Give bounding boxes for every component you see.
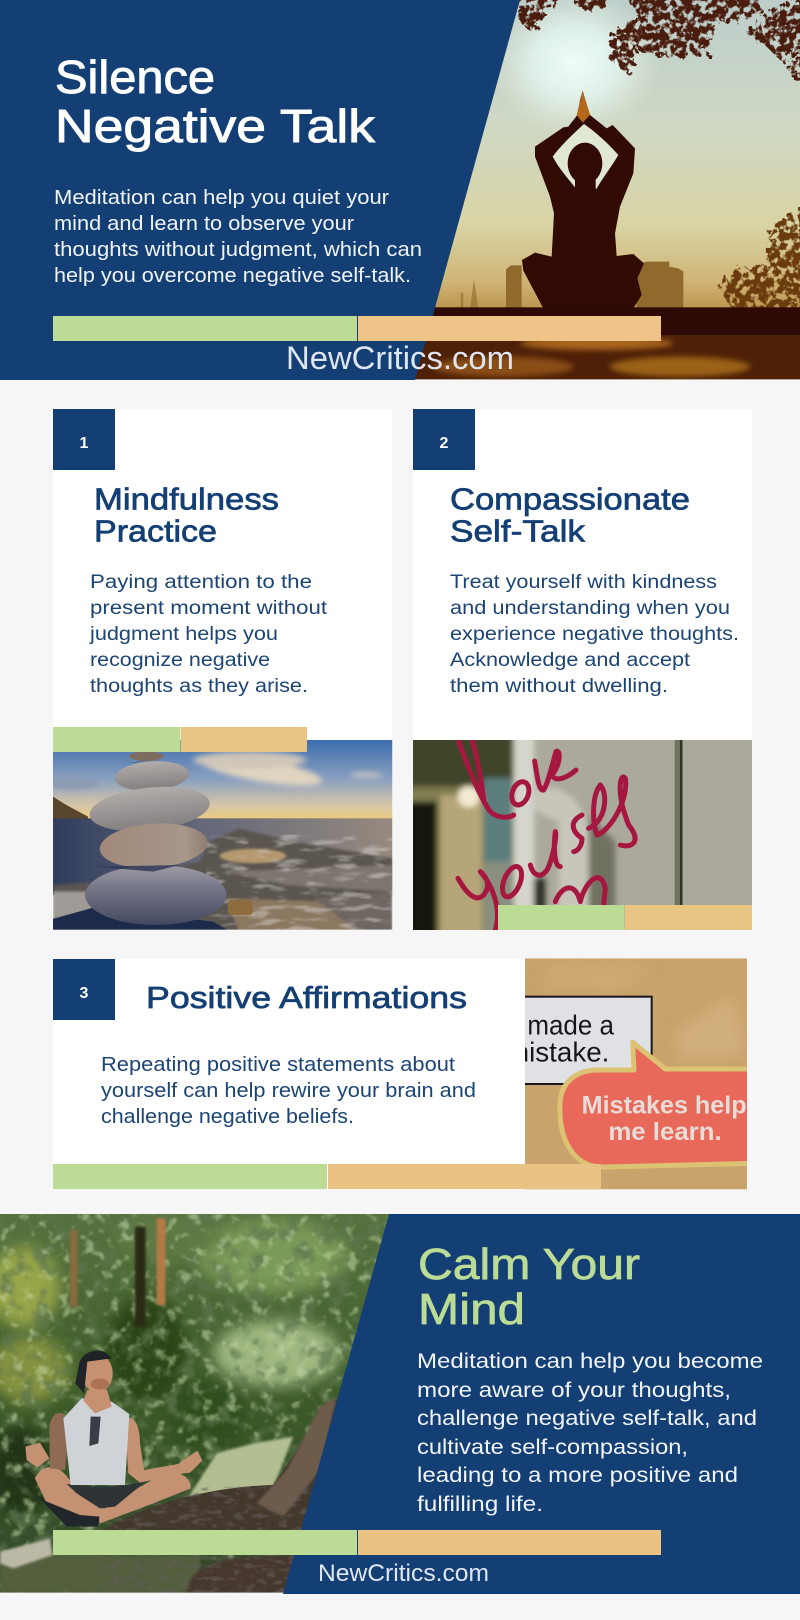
body text <box>450 572 739 697</box>
body text: recognize negative <box>90 650 270 671</box>
intro text: help you overcome negative self-talk. <box>54 265 411 287</box>
photo: yoga silhouette at sunset <box>410 0 800 380</box>
ground <box>432 307 800 335</box>
heading <box>94 482 279 548</box>
body text: Treat yourself with kindness <box>450 572 717 593</box>
grass <box>187 1437 293 1500</box>
sign card <box>520 997 652 1084</box>
body text: judgment helps you <box>89 624 278 645</box>
heading: Compassionate <box>450 482 690 516</box>
body text: present moment without <box>90 598 328 619</box>
heading: Mindfulness <box>94 482 279 516</box>
title: Negative Talk <box>55 100 376 152</box>
photo: love yourself mirror <box>413 740 752 930</box>
body text: Repeating positive statements about <box>101 1054 455 1076</box>
handwriting <box>458 740 635 930</box>
body text: Acknowledge and accept <box>450 650 691 671</box>
panel: card 3 positive affirmations <box>53 958 753 1189</box>
panel: card 2 compassionate self-talk <box>399 409 755 942</box>
heading <box>450 482 690 548</box>
intro text: Meditation can help you quiet your <box>54 187 389 209</box>
number badge 1 <box>53 409 115 470</box>
shirt <box>63 1398 129 1485</box>
heading <box>418 1240 640 1334</box>
website label: NewCritics.com <box>318 1560 489 1587</box>
icon: distant cooling towers <box>461 262 683 308</box>
title: Silence <box>55 51 215 103</box>
body text <box>417 1349 763 1516</box>
body text: leading to a more positive and <box>417 1463 738 1487</box>
colour bar <box>53 1530 661 1555</box>
body text: thoughts as they arise. <box>90 676 308 697</box>
intro text <box>54 187 422 287</box>
photo: mistakes help me learn: Mistakes help <box>582 1091 747 1119</box>
heading: Practice <box>94 514 217 548</box>
head <box>85 1359 113 1390</box>
body text: more aware of your thoughts, <box>417 1378 731 1402</box>
body text: fulfilling life. <box>417 1492 543 1516</box>
body text <box>101 1054 476 1128</box>
heading: Positive Affirmations <box>146 980 467 1015</box>
website label: NewCritics.com <box>286 340 514 376</box>
icon: tree branches <box>517 0 800 83</box>
photo: man meditating in forest <box>0 1213 400 1597</box>
title <box>55 51 376 152</box>
photo: mistakes help me learn: made a <box>527 1009 614 1040</box>
photo: mistakes help me learn: me learn. <box>608 1118 722 1146</box>
colour bar <box>53 1164 601 1189</box>
colour bar <box>53 727 307 752</box>
number badge 1: 1 <box>80 435 89 452</box>
body text: cultivate self-compassion, <box>417 1435 688 1459</box>
speech bubble <box>560 1042 753 1167</box>
intro text: thoughts without judgment, which can <box>54 239 422 261</box>
body text: challenge negative self-talk, and <box>417 1406 757 1430</box>
heading: Mind <box>418 1285 525 1334</box>
body text: them without dwelling. <box>450 676 668 697</box>
panel: card 1 mindfulness <box>46 409 392 933</box>
body text <box>89 572 328 697</box>
colour bar <box>498 905 752 930</box>
number badge 2: 2 <box>440 435 449 452</box>
colour bar <box>53 316 661 341</box>
heading: Self-Talk <box>450 514 586 548</box>
arms <box>49 1413 69 1470</box>
panel: calm your mind <box>0 1213 800 1597</box>
heading: Calm Your <box>418 1240 640 1289</box>
photo: mistakes help me learn <box>525 958 747 1190</box>
stones <box>85 752 253 925</box>
number badge 2 <box>413 409 475 470</box>
man <box>25 1350 202 1527</box>
intro text: mind and learn to observe your <box>54 213 354 235</box>
photo: stacked stones <box>46 740 392 933</box>
body text: Paying attention to the <box>90 572 312 593</box>
body text: yourself can help rewire your brain and <box>101 1080 476 1102</box>
number badge 3: 3 <box>80 985 89 1002</box>
number badge 3 <box>53 959 115 1020</box>
photo: mistakes help me learn: mistake. <box>506 1037 609 1068</box>
body text: Meditation can help you become <box>417 1349 763 1373</box>
body text: and understanding when you <box>450 598 730 619</box>
icon: meditating figure <box>522 91 644 308</box>
navy panel <box>0 0 520 380</box>
navy panel <box>283 1214 800 1594</box>
panel: header <box>0 0 800 380</box>
fallen log and stump <box>100 1397 343 1597</box>
body text: experience negative thoughts. <box>450 624 739 645</box>
body text: challenge negative beliefs. <box>101 1106 354 1128</box>
legs <box>35 1467 104 1516</box>
tree trunks <box>70 1218 165 1327</box>
